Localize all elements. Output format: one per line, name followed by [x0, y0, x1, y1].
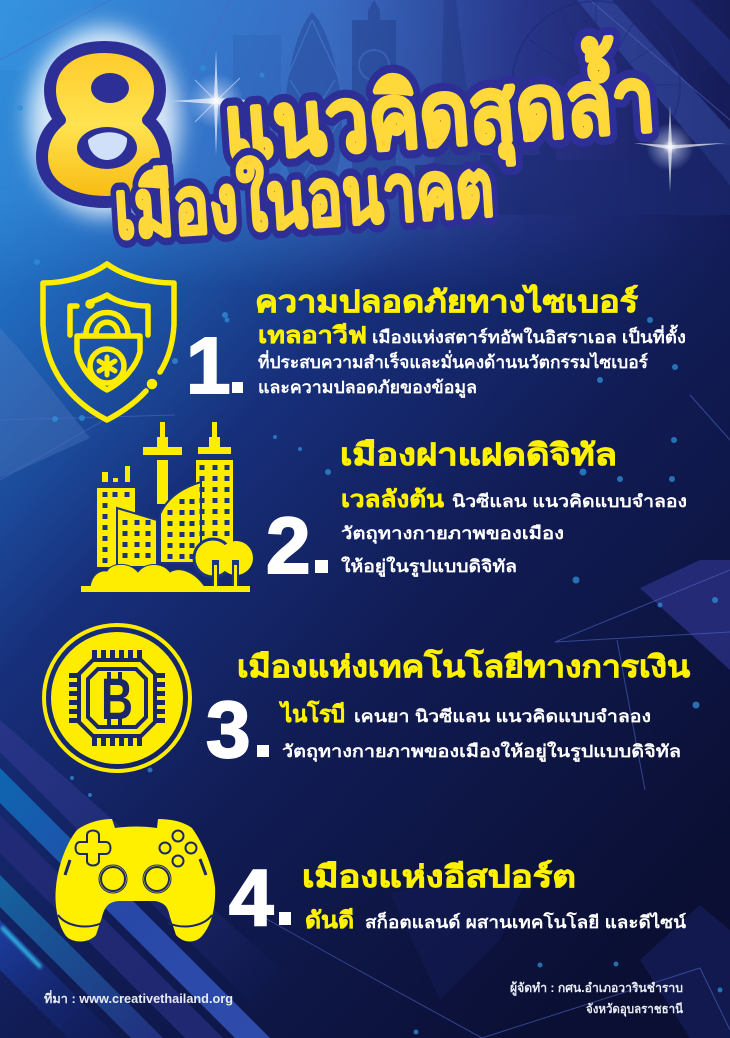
bullet square — [315, 560, 328, 573]
heading 3: เมืองแห่งเทคโนโลยีทางการเงิน — [237, 648, 691, 684]
item 4 — [55, 819, 686, 942]
icon: shield with padlock — [43, 264, 174, 420]
title line 2: เมืองในอนาคต — [111, 141, 496, 255]
icon: smart city — [81, 422, 253, 592]
footer: source: ที่มา : www.creativethailand.org — [44, 990, 233, 1006]
body 2: นิวซีแลน แนวคิดแบบจำลอง — [452, 491, 687, 511]
sparkle: right — [634, 105, 726, 192]
bullet square — [232, 382, 243, 393]
heading 1: ความปลอดภัยทางไซเบอร์ — [255, 284, 638, 319]
body 3: เคนยา นิวซีแลน แนวคิดแบบจำลอง — [354, 706, 651, 726]
footer: organizer: ผู้จัดทำ : กศน.อำเภอวารินชำราบ — [510, 981, 683, 996]
numeral 1: 1 — [186, 321, 230, 410]
icon: bitcoin chip coin: B — [101, 667, 133, 732]
body 3: ไนโรบี — [278, 700, 345, 727]
footer: organizer — [510, 981, 683, 1017]
numeral 3: 3 — [206, 685, 250, 774]
body 3: วัตถุทางกายภาพของเมืองให้อยู่ในรูปแบบดิจิทัล — [282, 741, 681, 763]
title line 1: แนวคิดสุดล้ำ — [219, 33, 659, 186]
body 3 — [278, 700, 681, 763]
icon: bitcoin chip coin — [44, 625, 190, 771]
body 2: ให้อยู่ในรูปแบบดิจิทัล — [341, 556, 517, 578]
item 2 — [81, 422, 687, 592]
item 3 — [44, 625, 691, 774]
body 1: ที่ประสบความสำเร็จและมั่นคงด้านนวัตกรรมไซเบอร์ — [258, 350, 649, 372]
bullet square — [257, 745, 269, 757]
body 2: วัตถุทางกายภาพของเมือง — [341, 523, 564, 544]
body 2 — [341, 486, 687, 578]
body 1: เมืองแห่งสตาร์ทอัพในอิสราเอล เป็นที่ตั้ง — [372, 324, 686, 347]
heading 4: เมืองแห่งอีสปอร์ต — [302, 860, 576, 894]
heading 2: เมืองฝาแฝดดิจิทัล — [340, 439, 617, 472]
item 1 — [43, 264, 686, 420]
numeral 4: 4 — [229, 853, 274, 942]
body 1 — [258, 322, 686, 399]
body 1: และความปลอดภัยของข้อมูล — [258, 378, 477, 399]
bullet square — [279, 912, 291, 925]
title line 2: เมืองในอนาคต — [111, 141, 496, 255]
title numeral 8 — [28, 27, 180, 217]
title — [28, 27, 659, 255]
skyline silhouettes — [0, 0, 730, 215]
footer: organizer: จังหวัดอุบลราชธานี — [586, 1002, 683, 1017]
body 4: สก็อตแลนด์ ผสานเทคโนโลยี และดีไซน์ — [365, 910, 686, 932]
icon: game controller — [55, 819, 215, 942]
sparkle: left — [172, 50, 262, 155]
body 4: ดันดี — [305, 907, 354, 933]
body 2: เวลลังต้น — [341, 486, 444, 512]
title line 1: แนวคิดสุดล้ำ — [219, 33, 659, 186]
numeral 2: 2 — [266, 501, 310, 590]
body 4 — [305, 907, 686, 933]
body 1: เทลอาวีฟ — [258, 322, 367, 348]
